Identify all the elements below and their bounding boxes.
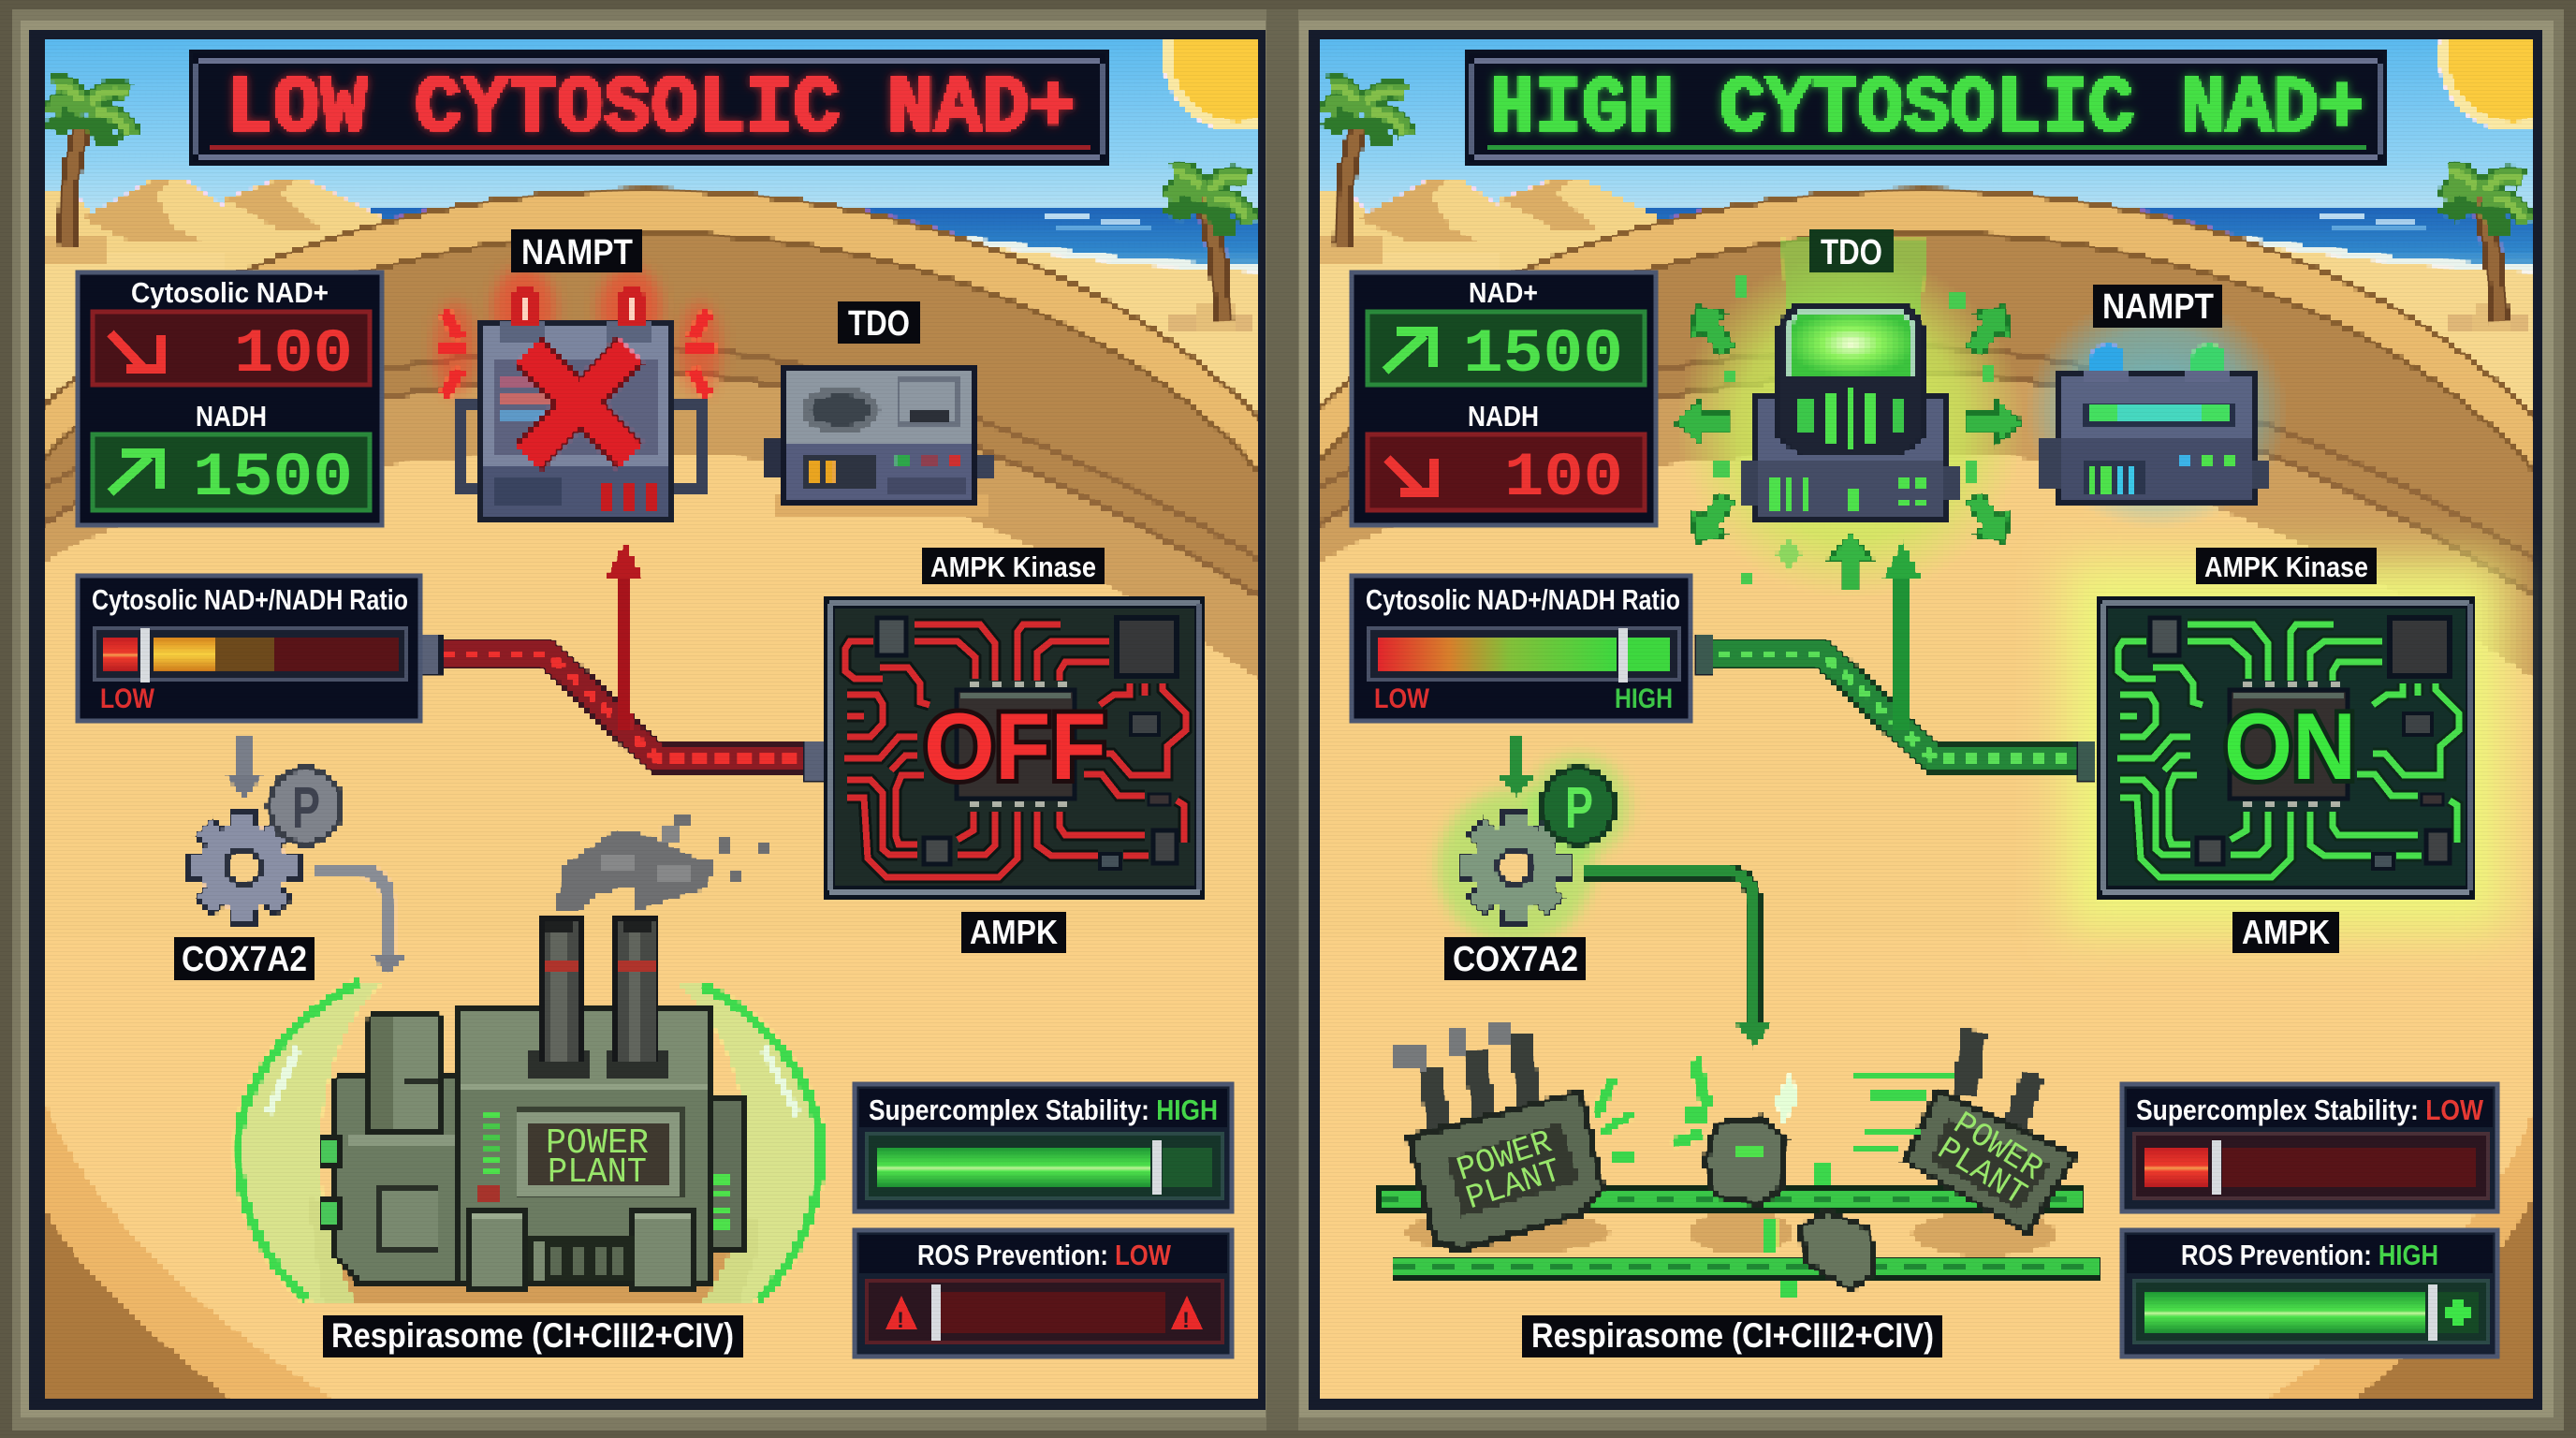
icon: power plant shattered into pieces [1395, 1022, 2080, 1296]
signal cable: ratio to AMPK (green) [1694, 635, 2095, 783]
panel: supercomplex stability HIGH: Supercomplex Stability: HIGH [869, 1093, 1218, 1126]
title: low cytosolic NAD+: LOW CYTOSOLIC NAD+ [226, 63, 1076, 154]
status text: OFF: OFF [924, 695, 1106, 800]
status text: ON: ON [2224, 695, 2356, 800]
label: Respirasome (low): Respirasome (CI+CIII2+CIV) [331, 1316, 734, 1355]
panel: ROS prevention LOW: ! [897, 1308, 904, 1333]
panel: supercomplex stability HIGH [855, 1084, 1232, 1211]
readout: NADH 100: 100 [1504, 443, 1623, 513]
panel: low state NAD+ and NADH readouts [78, 272, 382, 525]
panel: supercomplex stability LOW: Supercomplex Stability: LOW [2136, 1093, 2484, 1126]
phospho label P (green): P [1565, 776, 1593, 841]
label: NADH: NADH [196, 400, 267, 433]
power plant sign text (broken right): PLANT [1930, 1130, 2033, 1214]
label: AMPK Kinase (high): AMPK Kinase [2204, 550, 2368, 583]
signal cable: ratio to AMPK (red) [421, 635, 824, 783]
label: TDO (low): TDO [848, 304, 910, 344]
icon: green energy rails [1377, 1187, 2101, 1282]
panel: high state NAD+ and NADH readouts [1352, 272, 1656, 525]
label: AMPK (high): AMPK [2242, 913, 2330, 951]
label: TDO (high): TDO [1821, 233, 1882, 272]
panel: ROS prevention LOW [855, 1230, 1232, 1357]
arrow: AMPK up to NAMPT (red) [606, 541, 643, 730]
icon: COX7A2 gear grey with phospho coin [187, 735, 408, 976]
phospho label P (grey): P [292, 776, 320, 841]
label: NADH: NADH [1468, 400, 1539, 433]
icon: NAMPT machine active [2026, 295, 2288, 529]
power plant sign text (broken left) [1452, 1123, 1566, 1218]
power plant sign text (broken left): PLANT [1461, 1152, 1566, 1218]
icon: TDO machine idle [764, 364, 993, 515]
label: NAMPT (high): NAMPT [2102, 287, 2214, 327]
panel: low state NAD+/NADH ratio gauge: Cytosolic NAD+/NADH Ratio [92, 583, 408, 616]
label: AMPK (low): AMPK [970, 913, 1058, 951]
readout: NADH 1500: 1500 [193, 443, 353, 513]
readout: NAD+ 1500 [1368, 312, 1645, 389]
background: sky, sun, palms, dunes and sand crater (low panel) [45, 39, 1258, 1399]
arrow: AMPK up to TDO (green) [1883, 541, 1921, 730]
left panel artwork: beach scene and machines [45, 39, 1258, 1399]
power plant sign text (intact) [546, 1123, 649, 1193]
readout: NAD+ 100 [93, 312, 370, 389]
title: high cytosolic NAD+: HIGH CYTOSOLIC NAD+ [1489, 66, 2364, 154]
readout: NADH 100 [1368, 434, 1645, 513]
panel: ROS prevention LOW: ROS Prevention: LOW [917, 1239, 1172, 1271]
panel: high state NAD+/NADH ratio gauge: LOW [1374, 683, 1430, 714]
power plant sign text (intact): POWER [546, 1123, 649, 1164]
panel: high state NAD+/NADH ratio gauge: HIGH [1615, 683, 1673, 714]
label: NAMPT (low): NAMPT [521, 233, 633, 272]
panel: high state NAD+/NADH ratio gauge [1352, 576, 1690, 721]
label: COX7A2 (low): COX7A2 [182, 940, 307, 979]
glow around AMPK board [2064, 562, 2504, 932]
readout: NAD+ 100: 100 [234, 319, 353, 389]
readout: NADH 1500 [93, 434, 370, 513]
panel: low state NAD+/NADH ratio gauge [78, 576, 420, 721]
readout: NAD+ 1500: 1500 [1463, 319, 1623, 389]
AMPK circuit board OFF [824, 596, 1205, 900]
label: COX7A2 (high): COX7A2 [1453, 940, 1578, 979]
icon: TDO machine active with radiating arrows [1675, 239, 2025, 599]
label: NAD+: NAD+ [1469, 276, 1538, 309]
icon: COX7A2 gear green with phospho coin [1437, 735, 1775, 1049]
label: AMPK Kinase (low): AMPK Kinase [930, 550, 1096, 583]
panel: ROS prevention HIGH: ROS Prevention: HIGH [2181, 1239, 2438, 1271]
panel: high state NAD+/NADH ratio gauge: Cytosolic NAD+/NADH Ratio [1366, 583, 1680, 616]
background: sky, sun, palms, dunes and sand crater (high panel) [1320, 39, 2533, 1399]
icon: smokestack smoke [555, 816, 768, 913]
power plant sign text (broken right) [1930, 1105, 2049, 1214]
right panel artwork: beach scene and machines [1320, 39, 2542, 1399]
panel: supercomplex stability LOW [2122, 1084, 2497, 1211]
AMPK circuit board ON [2097, 596, 2475, 900]
power plant sign text (intact): PLANT [548, 1152, 647, 1193]
power plant sign text (broken right): POWER [1946, 1105, 2049, 1189]
panel: low state NAD+/NADH ratio gauge: LOW [100, 683, 155, 714]
icon: NAMPT machine disabled [434, 267, 721, 521]
icon: intact power plant inside green shield [238, 914, 821, 1303]
panel: ROS prevention LOW: ! [1182, 1308, 1190, 1333]
label: Cytosolic NAD+: Cytosolic NAD+ [131, 276, 329, 309]
power plant sign text (broken left): POWER [1452, 1123, 1557, 1190]
label: Respirasome (high): Respirasome (CI+CIII2+CIV) [1531, 1316, 1934, 1355]
panel: ROS prevention HIGH [2122, 1230, 2497, 1357]
